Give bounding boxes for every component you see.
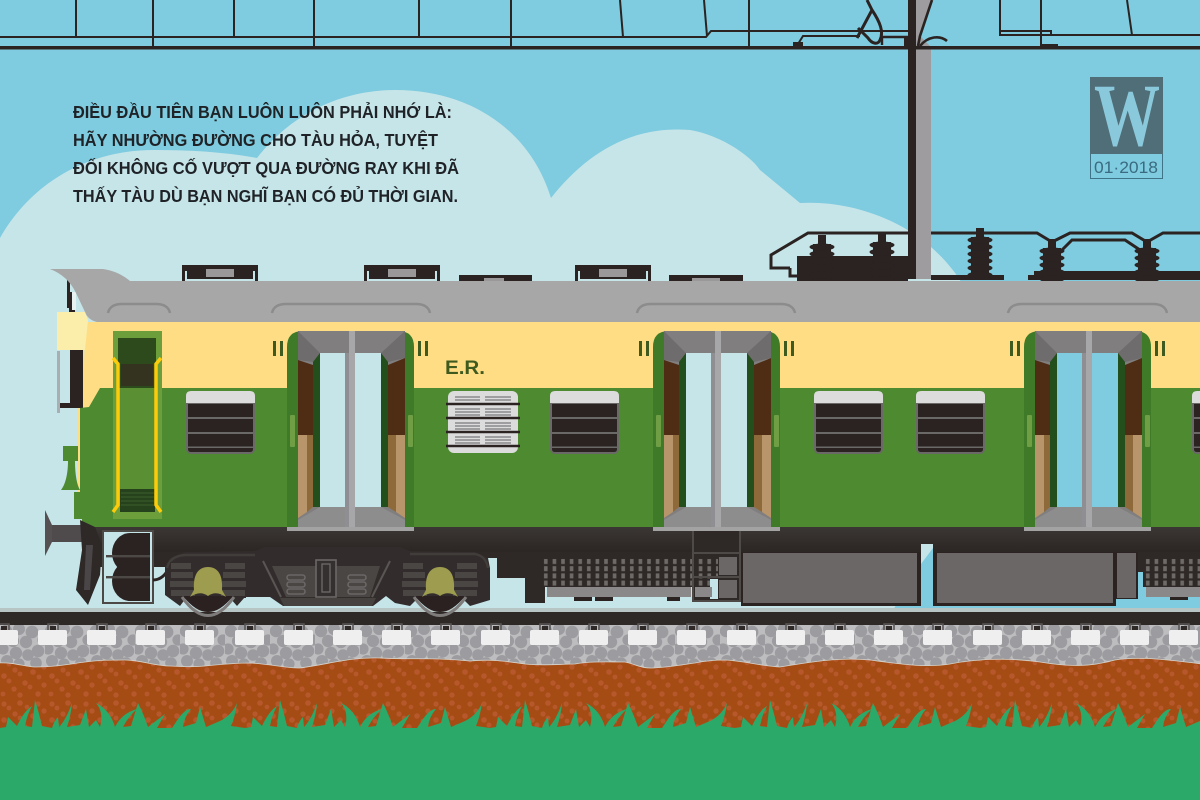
windows — [186, 391, 1200, 454]
coupler — [45, 510, 102, 605]
doors — [273, 331, 1165, 531]
text block: safety message: ĐIỀU ĐẦU TIÊN BẠN LUÔN LUÔN PHẢI NHỚ LÀ: — [73, 101, 452, 122]
logo badge: W — [1094, 67, 1160, 165]
soil — [0, 658, 1200, 735]
bogie — [165, 547, 490, 616]
ladder box — [693, 530, 740, 601]
cloud — [0, 90, 985, 610]
cream band — [78, 322, 1200, 492]
bolster — [263, 560, 390, 606]
label: E.R.: E.R. — [445, 358, 485, 379]
text block: safety message — [73, 101, 459, 206]
battery boxes — [741, 544, 1138, 606]
under-floor grille left — [542, 558, 692, 601]
grass — [0, 695, 1200, 800]
rail — [0, 608, 1200, 625]
front door — [113, 331, 162, 519]
horn — [61, 446, 80, 490]
train — [45, 265, 1200, 616]
front cab details — [57, 272, 83, 413]
underframe — [95, 527, 1200, 603]
text block: safety message: THẤY TÀU DÙ BẠN NGHĨ BẠN CÓ ĐỦ THỜI GIAN. — [73, 185, 458, 206]
overhead wires — [0, 0, 1200, 50]
logo badge — [1090, 67, 1163, 178]
grille box — [103, 531, 153, 603]
pole — [908, 0, 932, 279]
headlight panel — [57, 312, 88, 350]
roof gutters — [108, 304, 1167, 313]
brake pipe — [153, 570, 168, 580]
pantograph and roof insulators — [771, 228, 1200, 290]
roof vents — [182, 265, 743, 283]
under-floor grille right — [1143, 558, 1200, 600]
ballast — [0, 625, 1200, 671]
vent grille — [446, 391, 520, 453]
text block: safety message: HÃY NHƯỜNG ĐƯỜNG CHO TÀU HỎA, TUYỆT — [73, 129, 438, 150]
roof — [50, 269, 1200, 322]
sleepers — [0, 624, 1198, 645]
text block: safety message: ĐỐI KHÔNG CỐ VƯỢT QUA ĐƯỜNG RAY KHI ĐÃ — [73, 157, 459, 178]
logo badge: 01·2018 — [1094, 158, 1158, 177]
green body — [74, 388, 1200, 527]
